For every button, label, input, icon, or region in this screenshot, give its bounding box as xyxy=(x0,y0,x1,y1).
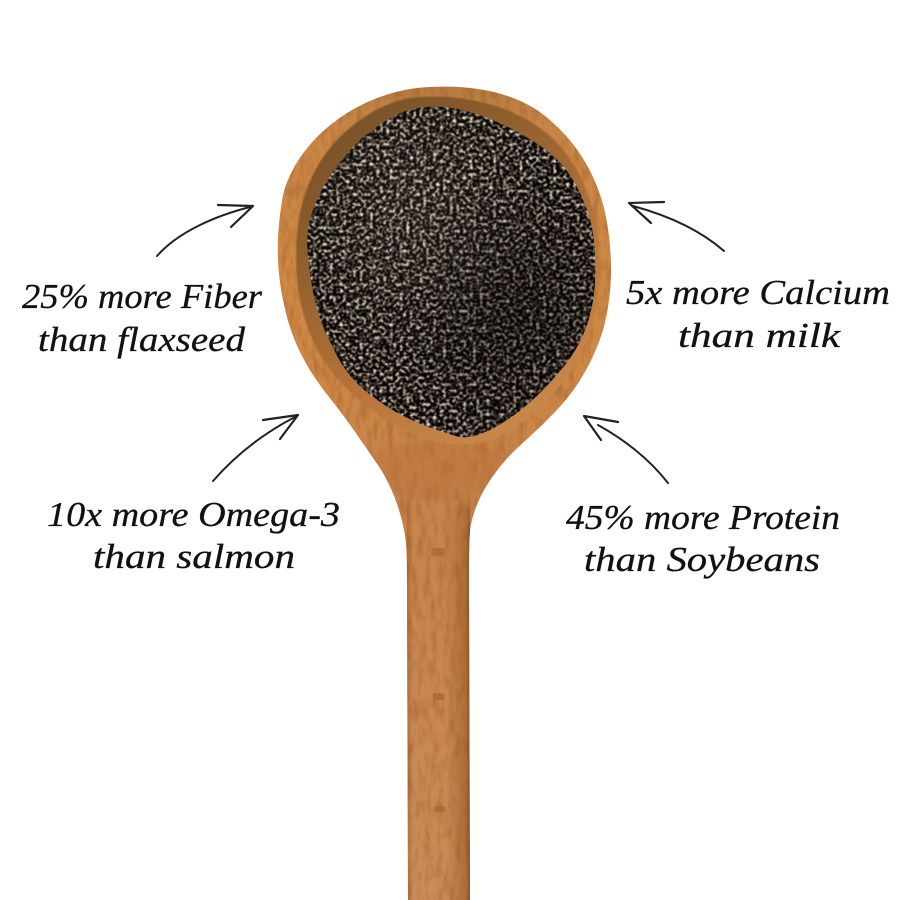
chia seeds xyxy=(300,100,600,445)
text: calcium: 5x more Calcium xyxy=(626,273,890,312)
callout: omega-3 xyxy=(47,415,340,576)
text: calcium: than milk xyxy=(678,316,842,355)
arrow: protein xyxy=(584,416,668,483)
wooden spoon with chia seeds xyxy=(270,80,620,900)
text: omega-3: than salmon xyxy=(93,537,295,576)
arrow: calcium xyxy=(629,202,724,251)
arrow: fiber xyxy=(157,205,253,256)
text: omega-3: 10x more Omega-3 xyxy=(47,495,340,534)
callout: fiber xyxy=(22,205,262,359)
text: protein xyxy=(566,498,840,579)
text: fiber: 25% more Fiber xyxy=(22,277,262,316)
text: protein: than Soybeans xyxy=(584,540,820,579)
text: omega-3 xyxy=(47,495,340,576)
arrow: omega-3 xyxy=(213,415,298,481)
text: fiber: than flaxseed xyxy=(38,320,246,359)
callout: protein xyxy=(566,416,840,579)
text: calcium xyxy=(626,273,890,355)
bowl hollow xyxy=(296,97,600,444)
spoon body xyxy=(270,80,620,900)
text: fiber xyxy=(22,277,262,359)
callout: calcium xyxy=(626,202,890,355)
text: protein: 45% more Protein xyxy=(566,498,840,537)
